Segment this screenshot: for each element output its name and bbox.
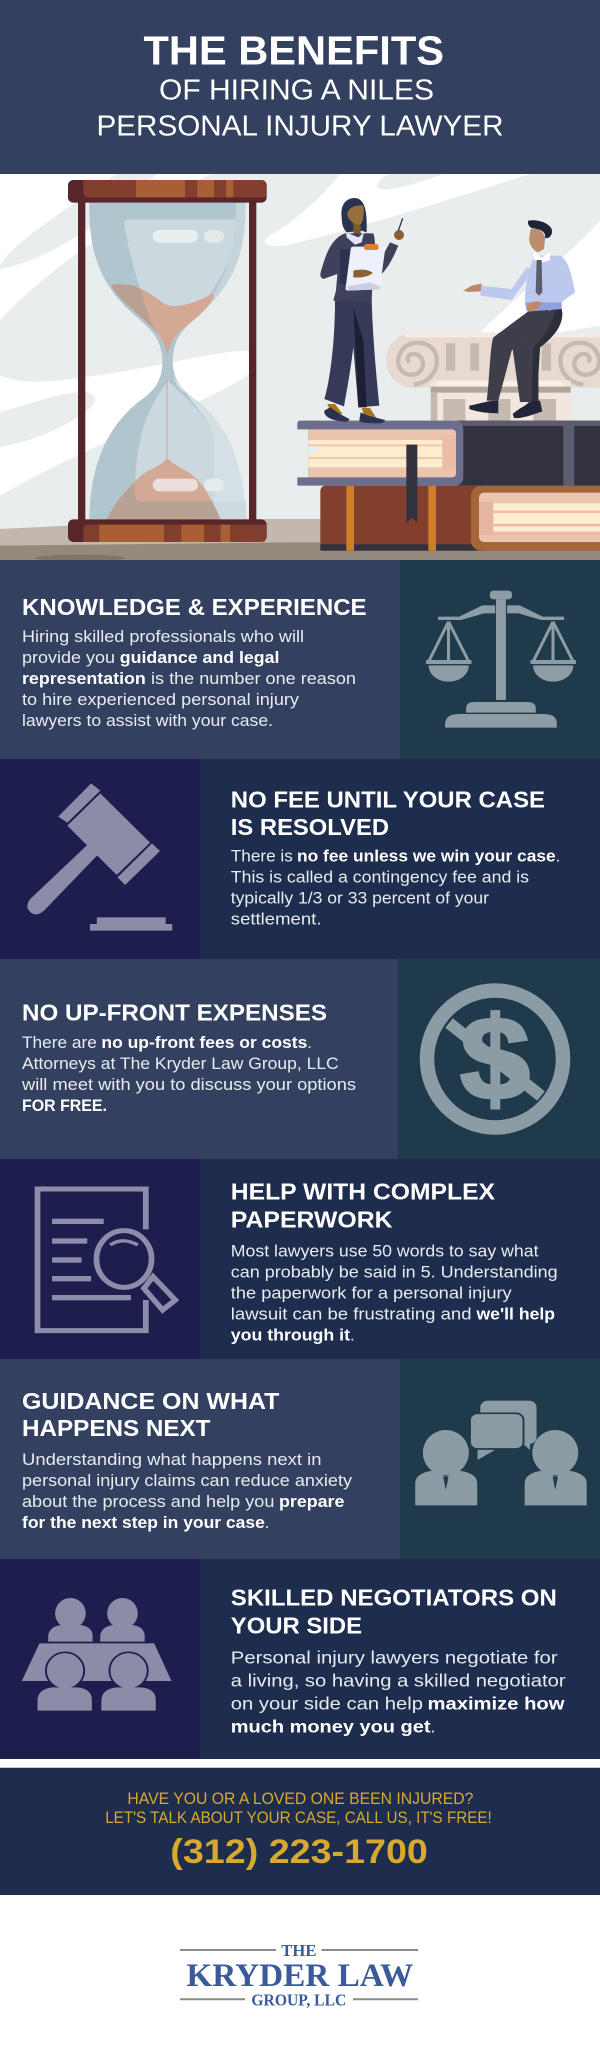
body text: guidance and legal xyxy=(120,649,279,667)
body text xyxy=(22,1451,353,1532)
hero illustration xyxy=(0,174,600,561)
heading: GUIDANCE ON WHAT xyxy=(22,1388,279,1414)
body text: personal injury claims can reduce anxiety xyxy=(22,1472,353,1490)
heading xyxy=(22,1388,279,1441)
hourglass xyxy=(68,180,267,542)
body text: maximize how xyxy=(428,1694,565,1714)
body text: no fee unless we win your case xyxy=(297,848,556,866)
body text xyxy=(22,628,356,730)
body text: . xyxy=(430,1717,435,1737)
heading: HAPPENS NEXT xyxy=(22,1415,210,1441)
body text: settlement. xyxy=(231,911,322,929)
body text: to hire experienced personal injury xyxy=(22,691,300,709)
column capital xyxy=(386,333,600,421)
body text: Understanding what happens next in xyxy=(22,1451,322,1469)
body text: for the next step in your case xyxy=(22,1514,265,1532)
body text xyxy=(231,848,560,929)
ground xyxy=(0,519,600,561)
heading: NO FEE UNTIL YOUR CASE xyxy=(231,786,545,812)
panel: skilled negotiators xyxy=(0,1559,600,1759)
call to action text xyxy=(105,1790,492,1827)
heading: KNOWLEDGE & EXPERIENCE xyxy=(22,594,367,620)
stacked books xyxy=(297,421,600,551)
panel: guidance on what happens next xyxy=(0,1359,600,1559)
subtitle line one: OF HIRING A NILES xyxy=(159,75,434,107)
body text: provide you xyxy=(22,649,115,667)
body text xyxy=(231,1243,558,1345)
heading: YOUR SIDE xyxy=(231,1612,362,1638)
body text: representation xyxy=(22,670,146,688)
phone number: (312) 223-1700 xyxy=(170,1833,428,1871)
body text: Personal injury lawyers negotiate for xyxy=(231,1648,558,1668)
call to action text: LET'S TALK ABOUT YOUR CASE, CALL US, IT'S FREE! xyxy=(105,1809,492,1827)
call to action panel xyxy=(0,1767,600,1895)
panel: help with paperwork xyxy=(0,1159,600,1359)
body text xyxy=(231,1648,566,1737)
icon: scales of justice xyxy=(426,591,576,728)
body text: the paperwork for a personal injury xyxy=(231,1285,513,1303)
call to action text: HAVE YOU OR A LOVED ONE BEEN INJURED? xyxy=(127,1790,473,1808)
logo: the kryder law group xyxy=(180,1941,418,2010)
body text: a living, so having a skilled negotiator xyxy=(231,1671,566,1691)
logo: the kryder law group: THE xyxy=(281,1941,316,1960)
body text: about the process and help you xyxy=(22,1493,274,1511)
body text: lawsuit can be frustrating and xyxy=(231,1306,472,1324)
body text: . xyxy=(307,1034,312,1052)
panel: no up-front expenses xyxy=(0,959,600,1159)
body text: will meet with you to discuss your options xyxy=(21,1076,356,1094)
body text: There are xyxy=(22,1034,97,1052)
body text: . xyxy=(350,1327,355,1345)
body text: much money you get xyxy=(231,1717,431,1737)
heading: SKILLED NEGOTIATORS ON xyxy=(231,1585,557,1611)
icon: people at a table xyxy=(22,1598,171,1711)
body text xyxy=(21,1034,356,1115)
body text: prepare xyxy=(279,1493,344,1511)
body text: Attorneys at The Kryder Law Group, LLC xyxy=(22,1055,339,1073)
body text: Most lawyers use 50 words to say what xyxy=(231,1243,539,1261)
heading: IS RESOLVED xyxy=(231,814,389,840)
heading: PAPERWORK xyxy=(231,1207,393,1233)
header panel xyxy=(0,0,600,174)
body text: can probably be said in 5. Understanding xyxy=(231,1264,558,1282)
body text: you through it xyxy=(231,1327,351,1345)
body text: typically 1/3 or 33 percent of your xyxy=(231,890,490,908)
body text: There is xyxy=(231,848,293,866)
heading xyxy=(231,1585,557,1638)
body text: FOR FREE. xyxy=(22,1097,107,1115)
body text: . xyxy=(556,848,560,866)
title: the benefits: THE BENEFITS xyxy=(144,28,444,74)
man figure xyxy=(463,220,575,418)
heading: NO UP-FRONT EXPENSES xyxy=(22,1000,327,1026)
body text: . xyxy=(265,1514,269,1532)
panel: knowledge and experience xyxy=(0,560,600,759)
body text: Hiring skilled professionals who will xyxy=(22,628,304,646)
woman figure xyxy=(320,198,404,423)
body text: This is called a contingency fee and is xyxy=(231,869,529,887)
heading: HELP WITH COMPLEX xyxy=(231,1178,496,1204)
icon: document and magnifier xyxy=(38,1189,175,1331)
logo: the kryder law group: KRYDER LAW xyxy=(186,1958,413,1994)
icon: no dollar sign: $ xyxy=(460,993,530,1125)
heading xyxy=(231,1178,496,1233)
body text: we'll help xyxy=(475,1306,555,1324)
icon: gavel xyxy=(27,783,172,931)
body text: on your side can help xyxy=(231,1694,423,1714)
panel: no fee until resolved xyxy=(0,759,600,959)
subtitle line two: PERSONAL INJURY LAWYER xyxy=(96,111,504,143)
logo: the kryder law group: GROUP, LLC xyxy=(251,1991,346,2010)
body text: no up-front fees or costs xyxy=(101,1034,307,1052)
body text: is the number one reason xyxy=(151,670,356,688)
heading xyxy=(231,786,545,840)
body text: lawyers to assist with your case. xyxy=(22,712,273,730)
icon: no dollar sign xyxy=(427,990,563,1128)
icon: two people talking xyxy=(415,1401,587,1505)
